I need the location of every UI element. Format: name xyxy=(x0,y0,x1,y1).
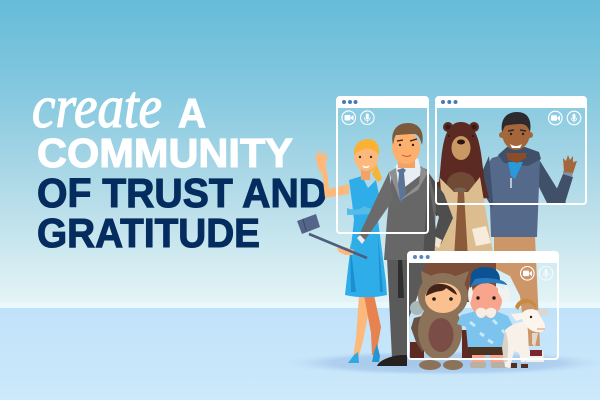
window dots xyxy=(413,255,430,259)
window title bar xyxy=(408,252,558,263)
mascot: goat xyxy=(502,299,549,368)
title line: GRATITUDE: GRATITUDE xyxy=(37,210,260,256)
title line: OF TRUST AND: OF TRUST AND xyxy=(37,170,327,216)
floor shadow xyxy=(280,350,600,376)
icon: camera xyxy=(342,111,356,124)
selfie stick xyxy=(297,214,367,258)
icon: microphone xyxy=(360,111,374,124)
figure: bear xyxy=(410,122,496,360)
window dots xyxy=(342,100,358,104)
title word: A: A xyxy=(178,90,206,136)
icon: microphone xyxy=(567,111,581,125)
window title bar xyxy=(337,97,428,108)
mascot: einstein xyxy=(457,267,513,368)
mascot: astro xyxy=(410,271,469,370)
icon: camera xyxy=(520,266,534,280)
title line: COMMUNITY: COMMUNITY xyxy=(37,130,293,176)
icon: camera xyxy=(548,111,562,125)
window: mascots xyxy=(408,252,558,359)
horizon band xyxy=(0,302,600,308)
window title bar xyxy=(436,97,586,108)
window dots xyxy=(441,100,458,104)
background sky xyxy=(0,0,600,303)
icon: microphone xyxy=(539,266,553,280)
window: bear and man xyxy=(436,97,586,204)
floor xyxy=(0,308,600,400)
title xyxy=(32,74,327,256)
figure: man in hoodie xyxy=(482,112,577,362)
title word: create: create xyxy=(32,74,162,140)
window: woman and man xyxy=(337,97,428,233)
figure: man in grey suit xyxy=(357,123,453,366)
figure: woman with selfie stick xyxy=(297,139,387,363)
